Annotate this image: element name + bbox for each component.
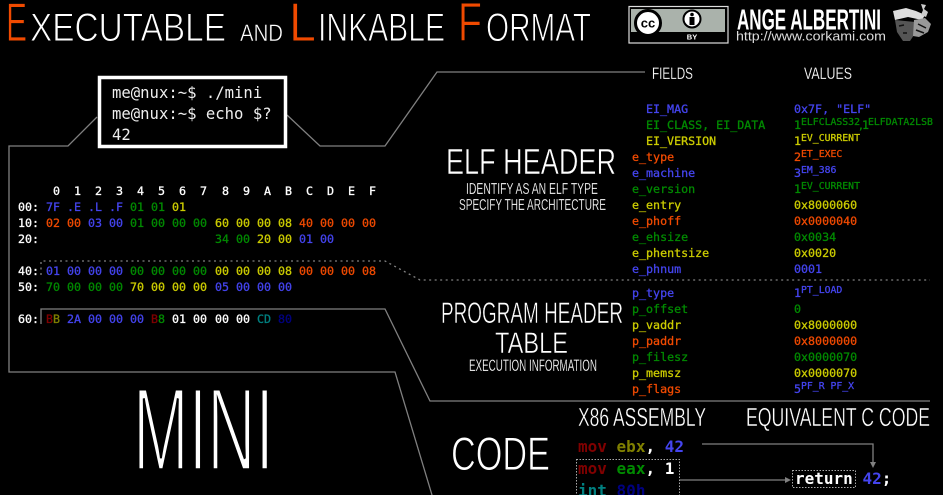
ELF header values: ET_EXEC [801,149,842,160]
dotted highlight boxes [576,460,856,495]
ELF header fields: e_ehsize [632,230,688,244]
code heading: CODE [451,427,550,480]
hex dump: 01 [299,232,313,246]
hex dump: 00 [67,216,81,230]
terminal box: me@nux:~$ echo $? [112,105,272,123]
title: ORMAT [486,6,591,50]
hex dump: 03 [88,216,102,230]
ELF header fields: e_phnum [632,262,681,276]
hex dump: 2A [67,312,81,326]
ELF header values: ELFCLASS32 [801,117,860,128]
program header description: EXECUTION INFORMATION [469,356,597,375]
program header fields: p_vaddr [632,318,681,332]
ELF header values: 0001 [794,262,822,276]
program header values: 5 [794,382,801,396]
hex dump: 00 [215,312,229,326]
assembly listing: mov eax, 1 [578,459,674,478]
program header fields: p_type [632,286,674,300]
hex dump: 00 [172,216,186,230]
values column heading: VALUES [804,64,852,83]
hex dump: 00 [193,216,207,230]
hex dump: 00 [151,280,165,294]
program header fields [632,286,688,396]
hex dump: 5 [158,184,165,198]
hex dump: B [53,312,60,326]
hex dump: 10: [18,216,39,230]
hex dump: B [285,184,292,198]
hex dump: 00 [236,280,250,294]
ELF header fields: e_phentsize [632,246,709,260]
hex dump: E [348,184,355,198]
hex dump: 3 [116,184,123,198]
hex dump: D [327,184,334,198]
hex dump: 01 [172,312,186,326]
hex dump: 00 [341,264,355,278]
ELF header values: 1 [862,118,869,132]
hex dump: F [369,184,376,198]
hex dump: 70 [130,280,144,294]
hex dump: 00 [109,280,123,294]
terminal box: me@nux:~$ ./mini [112,84,262,102]
hex dump: 00 [362,216,376,230]
program header heading [441,297,623,360]
hex dump: 00 [320,232,334,246]
hex dump: 05 [215,280,229,294]
assembly listing [578,437,684,495]
hex dump: 08 [362,264,376,278]
hex dump: 40: [18,264,39,278]
hex dump: 1 [74,184,81,198]
ELF header values [794,102,933,276]
ELF header values: EM_386 [801,165,836,176]
title: INKABLE [318,6,445,50]
hex dump: 00 [130,264,144,278]
C code listing: return 42; [795,469,891,488]
hex dump: 00 [236,216,250,230]
hex dump: 01 [130,216,144,230]
program header heading: PROGRAM HEADER [441,297,623,330]
hex dump: 00 [172,264,186,278]
hex dump: 7F [46,200,60,214]
program header values: 0x0000070 [794,366,857,380]
program header values: 1 [794,286,801,300]
hex dump: 00 [236,264,250,278]
terminal box [100,78,286,146]
ELF header values: 2 [794,150,801,164]
icon: portrait [893,4,931,41]
hex dump: 20 [257,232,271,246]
hex dump: 50: [18,280,39,294]
hex dump: 00 [67,264,81,278]
fields column heading: FIELDS [652,64,693,83]
ELF header fields: e_phoff [632,214,681,228]
program header fields: p_flags [632,382,681,396]
program header fields: p_memsz [632,366,681,380]
hex dump: 00 [130,312,144,326]
icon: creative commons BY badge: cc [641,16,655,30]
hex dump: 00 [257,216,271,230]
ELF header fields: EI_VERSION [646,134,716,148]
hex dump: 00 [320,264,334,278]
hex dump: 00 [193,280,207,294]
hex dump: 80 [278,312,292,326]
ELF header description: IDENTIFY AS AN ELF TYPE [466,181,598,198]
ELF header description [459,181,606,214]
hex dump: 0 [53,184,60,198]
ELF header values: 1 [794,134,801,148]
hex dump: 00 [109,264,123,278]
title [6,0,591,53]
hex dump: 70 [46,280,60,294]
ELF header values: 1 [794,118,801,132]
ELF header heading: ELF HEADER [446,141,616,182]
title: AND [240,20,283,47]
hex dump: 00 [215,264,229,278]
hex dump: 01 [172,200,186,214]
hex dump: 00 [236,312,250,326]
ELF header values: 3 [794,166,801,180]
hex dump: 00 [278,232,292,246]
ELF header values: EV_CURRENT [801,181,860,192]
hex dump: 00 [320,216,334,230]
hex dump: 00: [18,200,39,214]
ELF header values: ELFDATA2LSB [868,117,933,128]
program header values: 0x8000000 [794,318,857,332]
hex dump: 4 [137,184,144,198]
icon: creative commons BY badge [629,6,728,43]
terminal box: 42 [112,126,131,144]
hex dump: 60 [215,216,229,230]
assembly listing: mov ebx, 42 [578,437,684,456]
hex dump: 00 [299,264,313,278]
hex dump: B [151,312,158,326]
ELF header fields: EI_CLASS, EI_DATA [646,118,765,132]
title: XECUTABLE [30,6,226,50]
hex dump: 00 [236,232,250,246]
hex dump: 08 [278,264,292,278]
hex dump: 6 [179,184,186,198]
ELF header fields [632,102,765,276]
hex dump: 00 [172,280,186,294]
hex dump: 00 [67,280,81,294]
program header heading: TABLE [495,327,568,360]
ELF header fields: e_entry [632,198,681,212]
ELF header values: EV_CURRENT [801,133,860,144]
hex dump: 00 [257,264,271,278]
hex dump: 2 [95,184,102,198]
hex dump: 00 [257,280,271,294]
ELF header values: 1 [794,182,801,196]
hex dump: 00 [278,280,292,294]
hex dump: 00 [88,264,102,278]
hex dump: CD [257,312,271,326]
hex dump: 00 [151,264,165,278]
hex dump: 00 [88,312,102,326]
hex dump: .L [88,200,102,214]
hex dump: 02 [46,216,60,230]
hex dump: 00 [151,216,165,230]
ELF header values: 0x0000040 [794,214,857,228]
ELF header values: 0x8000060 [794,198,857,212]
ELF header values: , [858,121,864,132]
ELF header fields: EI_MAG [646,102,688,116]
hex dump [18,184,376,326]
ELF header values: 0x0020 [794,246,836,260]
ELF header values: 0x0034 [794,230,836,244]
hex dump: 00 [193,312,207,326]
hex dump: A [264,184,271,198]
hex dump: 8 [158,312,165,326]
program header values: 0 [794,302,801,316]
hex dump: 00 [193,264,207,278]
icon: creative commons BY badge: BY [687,32,697,42]
hex dump: 20: [18,232,39,246]
MINI label: MINI [133,364,274,495]
program header values: PT_LOAD [801,285,842,296]
hex dump: 34 [215,232,229,246]
ELF header fields: e_type [632,150,674,164]
hex dump: 00 [88,280,102,294]
hex dump: 00 [109,216,123,230]
program header fields: p_filesz [632,350,688,364]
hex dump: 01 [46,264,60,278]
ELF header fields: e_version [632,182,695,196]
hex dump: 8 [222,184,229,198]
arrow: exit call to return [680,477,791,483]
arrow: 42 to return value [702,444,876,468]
hex dump: 40 [299,216,313,230]
hex dump: 9 [243,184,250,198]
hex dump: .E [67,200,81,214]
ELF header fields: e_machine [632,166,695,180]
hex dump: 01 [151,200,165,214]
ELF header values: 0x7F, "ELF" [794,102,871,116]
author url: http://www.corkami.com [736,28,886,44]
hex dump: 7 [200,184,207,198]
x86 assembly heading: X86 ASSEMBLY [578,402,706,432]
hex dump: B [46,312,53,326]
hex dump: 60: [18,312,39,326]
program header values: 0x8000000 [794,334,857,348]
program header values [794,285,857,396]
program header values: PF_R PF_X [801,381,854,392]
hex dump: C [306,184,313,198]
hex dump: 01 [130,200,144,214]
hex dump: 00 [109,312,123,326]
program header fields: p_paddr [632,334,681,348]
program header fields: p_offset [632,302,688,316]
program header values: 0x0000070 [794,350,857,364]
hex dump: 08 [278,216,292,230]
ELF header description: SPECIFY THE ARCHITECTURE [459,197,606,214]
hex dump: .F [109,200,123,214]
hex dump: 00 [341,216,355,230]
